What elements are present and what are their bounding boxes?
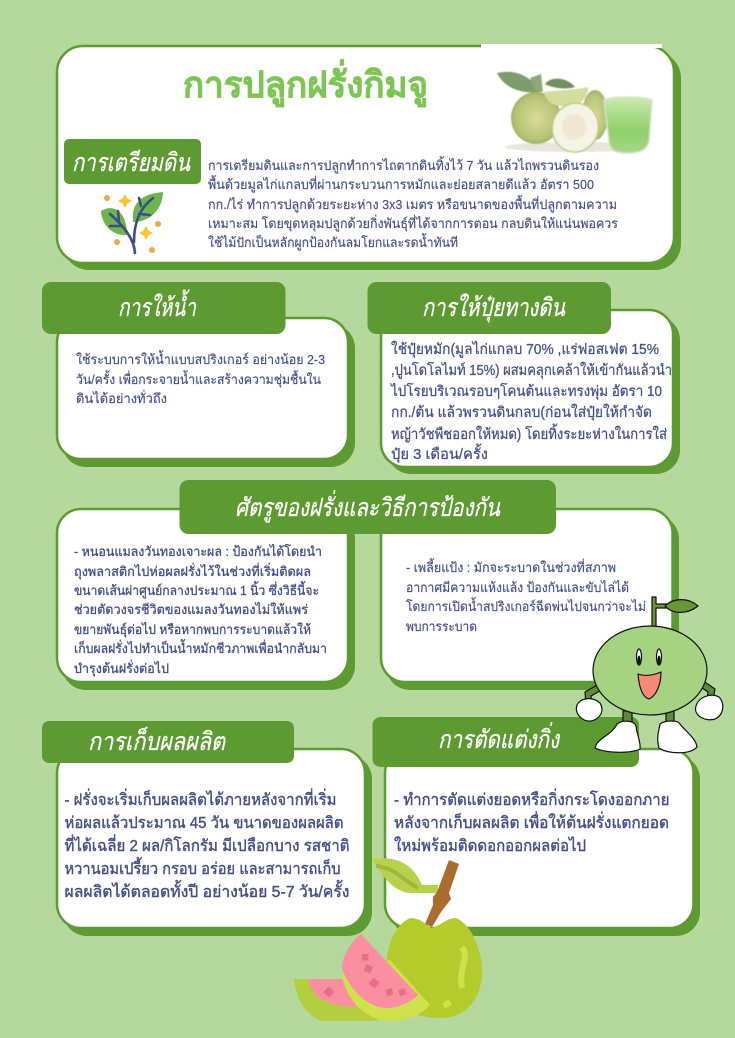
heading: pruning [372, 717, 639, 767]
text block: pruning: - ทำการตัดแต่งยอดหรือกิ่งกระโดงออกภาย [394, 788, 670, 809]
text block: soil preparation: พื้นด้วยมูลไก่แกลบที่ผ่านกระบวนการหมักและย่อยสลายดีแล้ว อัตรา 500 [208, 175, 594, 193]
text block: harvest [64, 788, 350, 901]
title: การปลูกฝรั่งกิมจู [183, 59, 428, 108]
card: fruit fly: ขยายพันธุ์ต่อไป หรือหากพบการระบาดแล้วให้ [74, 622, 311, 638]
text block: harvest: ที่ได้เฉลี่ย 2 ผล/กิโลกรัม มีเปลือกบาง รสชาติ [64, 834, 350, 855]
text block: pruning: ใหม่พร้อมติดดอกออกผลต่อไป [394, 836, 586, 855]
text block: watering: ดินได้อย่างทั่วถึง [76, 390, 167, 406]
heading: harvest: การเก็บผลผลิต [88, 726, 227, 756]
text block: pruning [394, 788, 670, 855]
panel: soil fertilizer [368, 282, 680, 474]
heading: watering [42, 282, 286, 334]
text block: soil preparation: เหมาะสม โดยขุดหลุมปลูกด้วยกิ่งพันธุ์ที่ได้จากการตอน กลบดินให้แน่นพอควร [208, 215, 618, 232]
text block: soil fertilizer [390, 340, 672, 463]
text block: soil preparation: ใช้ไม้ปักเป็นหลักผูกป้องกันลมโยกและรดน้ำทันที [208, 233, 458, 251]
heading: watering: การให้น้ำ [118, 289, 197, 322]
panel: harvest [42, 721, 372, 936]
heading: soil fertilizer: การให้ปุ๋ยทางดิน [422, 293, 566, 323]
text block: soil fertilizer: หญ้าวัชพืชออกให้หมด) โดยทิ้งระยะห่างในการใส่ [391, 423, 667, 443]
card: powdery mildew [381, 509, 679, 690]
heading: soil fertilizer [368, 282, 611, 334]
card: powdery mildew: โดยการเปิดน้ำสปริงเกอร์ฉีดพ่นไปจนกว่าจะไม่ [406, 597, 646, 614]
text block: soil preparation: การเตรียมดินและการปลูกทำการไถตากดินทิ้งไว้ 7 วัน แล้วไถพรวนดินรอง [208, 156, 599, 174]
text block: soil fertilizer: ใช้ปุ๋ยหมัก(มูลไก่แกลบ 70% ,แร่ฟอสเฟต 15% [391, 340, 659, 358]
heading: soil preparation [64, 139, 201, 184]
heading: soil preparation: การเตรียมดิน [72, 149, 191, 177]
card: fruit fly [57, 509, 355, 690]
card: fruit fly: บำรุงต้นฝรั่งต่อไป [74, 660, 169, 677]
icon: guava fruit illustration [294, 858, 482, 1021]
card: fruit fly: - หนอนแมลงวันทองเจาะผล : ป้องกันได้โดยนำ [74, 544, 322, 559]
card: fruit fly: เก็บผลฝรั่งไปทำเป็นน้ำหมักชีวภาพเพื่อนำกลับมา [74, 639, 327, 656]
heading: harvest [42, 721, 294, 763]
card: powdery mildew: อากาศมีความแห้งแล้ง ป้องกันและขับไล่ได้ [406, 580, 629, 595]
heading: pests and prevention [180, 480, 556, 534]
panel: watering [42, 282, 355, 467]
card: fruit fly: ช่วยตัดวงจรชีวิตของแมลงวันทองไม่ให้แพร่ [74, 602, 308, 617]
text block: harvest: ห่อผลแล้วประมาณ 45 วัน ขนาดของผลผลิต [64, 814, 344, 832]
text block: soil preparation [208, 156, 618, 251]
icon: guava fruits and juice photo [497, 72, 652, 157]
panel: soil preparation [57, 44, 681, 270]
text block: watering: ใช้ระบบการให้น้ำแบบสปริงเกอร์ อย่างน้อย 2-3 [76, 350, 325, 367]
text block: soil fertilizer: กก./ต้น แล้วพรวนดินกลบ(ก่อนใส่ปุ๋ยให้กำจัด [391, 403, 652, 421]
icon: seedling [101, 192, 163, 253]
text block: pruning: หลังจากเก็บผลผลิต เพื่อให้ต้นฝรั่งแตกยอด [394, 811, 669, 832]
panel: pruning [372, 717, 700, 936]
text block: soil fertilizer: ,ปูนโดโลไมท์ 15%) ผสมคลุกเคล้าให้เข้ากันแล้วนำ [391, 361, 672, 379]
text block: harvest: ผลผลิตได้ตลอดทั้งปี อย่างน้อย 5-7 วัน/ครั้ง [64, 880, 350, 901]
text block: watering: วัน/ครั้ง เพื่อกระจายน้ำและสร้างความชุ่มชื้นใน [76, 370, 321, 388]
text block: soil fertilizer: ปุ๋ย 3 เดือน/ครั้ง [391, 443, 488, 463]
panel: pests and prevention [57, 480, 679, 690]
text block: watering [76, 350, 325, 406]
card: powdery mildew: พบการระบาด [406, 619, 477, 634]
text block: soil fertilizer: ไปโรยบริเวณรอบๆโคนต้นและทรงพุ่ม อัตรา 10 [390, 382, 662, 400]
text block: soil preparation: กก./ไร่ ทำการปลูกด้วยระยะห่าง 3x3 เมตร หรือขนาดของพื้นที่ปลูกตามความ [208, 195, 617, 213]
icon: guava mascot [576, 597, 723, 753]
text block: harvest: - ฝรั่งจะเริ่มเก็บผลผลิตได้ภายหลังจากที่เริ่ม [64, 788, 336, 809]
heading: pruning: การตัดแต่งกิ่ง [438, 722, 560, 754]
heading: pests and prevention: ศัตรูของฝรั่งและวิธีการป้องกัน [235, 490, 501, 523]
card: fruit fly: ขนาดเส้นผ่าศูนย์กลางประมาณ 1 นิ้ว ซึ่งวิธีนี้จะ [74, 581, 319, 599]
card: powdery mildew: - เพลี้ยแป้ง : มักจะระบาดในช่วงที่สภาพ [406, 558, 616, 575]
text block: harvest: หวานอมเปรี้ยว กรอบ อร่อย และสามารถเก็บ [64, 857, 340, 878]
card: fruit fly: ถุงพลาสติกไปห่อผลฝรั่งไว้ในช่วงที่เริ่มติดผล [74, 563, 311, 580]
